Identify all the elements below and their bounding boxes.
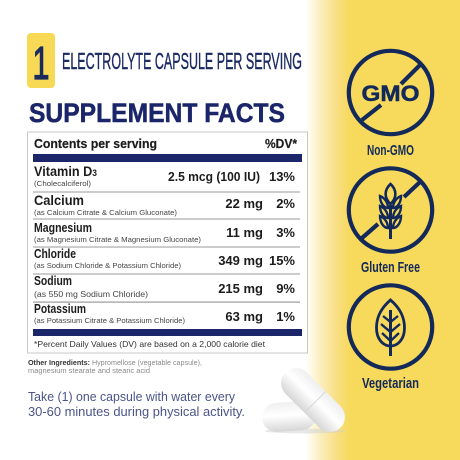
- row: magnesium: Magnesium: [34, 221, 92, 235]
- row: vitamin d3: Vitamin D3: [34, 164, 97, 179]
- table header: [34, 136, 298, 151]
- row: magnesium: [34, 221, 295, 244]
- row: sodium: [34, 274, 295, 299]
- label: vegetarian: Vegetarian: [362, 375, 419, 392]
- row: chloride: [34, 247, 295, 270]
- yellow side panel: [305, 0, 460, 460]
- row: potassium: 63 mg: [225, 309, 263, 324]
- row: chloride: Chloride: [34, 247, 76, 261]
- row: calcium: (as Calcium Citrate & Calcium Gluconate): [34, 208, 178, 217]
- row: chloride: 15%: [269, 253, 295, 268]
- row: sodium: (as 550 mg Sodium Chloride): [34, 290, 148, 299]
- row: sodium: 215 mg: [218, 281, 263, 296]
- other ingredients: Other Ingredients: Hypromellose (vegetable capsule),: [28, 360, 202, 367]
- row: calcium: 2%: [276, 196, 295, 211]
- directions text: 30-60 minutes during physical activity.: [28, 404, 245, 419]
- icon: vegetarian: [349, 285, 432, 369]
- icon: non-GMO: [349, 51, 432, 134]
- row: sodium: 9%: [276, 281, 295, 296]
- footnote: *Percent Daily Values (DV) are based on a 2,000 calorie diet: [34, 339, 266, 349]
- panel: supplement facts table: [28, 132, 308, 353]
- row: potassium: 1%: [276, 309, 295, 324]
- bottom bar: [33, 329, 302, 336]
- row: potassium: (as Potassium Citrate & Potassium Chloride): [34, 316, 186, 325]
- number badge: [27, 33, 55, 89]
- row: calcium: Calcium: [34, 193, 84, 208]
- row: vitamin d3: 2.5 mcg (100 IU): [168, 169, 260, 184]
- row: potassium: Potassium: [34, 302, 86, 316]
- label: gluten free: Gluten Free: [361, 259, 420, 276]
- other ingredients: [28, 360, 202, 375]
- row: chloride: (as Sodium Chloride & Potassium Chloride): [34, 261, 181, 270]
- row: vitamin d3: [34, 164, 295, 188]
- row: magnesium: 3%: [276, 225, 295, 240]
- row: vitamin d3: 13%: [269, 169, 295, 184]
- top bar: [33, 154, 302, 162]
- icon: gluten free: [349, 168, 432, 252]
- row: magnesium: (as Magnesium Citrate & Magnesium Gluconate): [34, 235, 202, 244]
- table header: %DV*: [265, 136, 298, 151]
- label: non-GMO: Non-GMO: [367, 142, 414, 159]
- number badge: 1: [32, 37, 50, 89]
- row: magnesium: 11 mg: [226, 225, 263, 240]
- row: potassium: [34, 302, 295, 325]
- table header: Contents per serving: [34, 136, 157, 151]
- row: vitamin d3: (Cholecalciferol): [34, 179, 92, 188]
- capsules image: [261, 362, 351, 438]
- directions text: [28, 389, 245, 419]
- title: SUPPLEMENT FACTS: [29, 98, 285, 128]
- row: chloride: 349 mg: [218, 253, 263, 268]
- row: calcium: 22 mg: [225, 196, 263, 211]
- icon: non-GMO: GMO: [362, 81, 420, 106]
- row: calcium: [34, 193, 295, 217]
- directions text: Take (1) one capsule with water every: [28, 389, 235, 404]
- other ingredients: magnesium stearate and stearic acid: [28, 368, 150, 375]
- row: sodium: Sodium: [34, 274, 72, 288]
